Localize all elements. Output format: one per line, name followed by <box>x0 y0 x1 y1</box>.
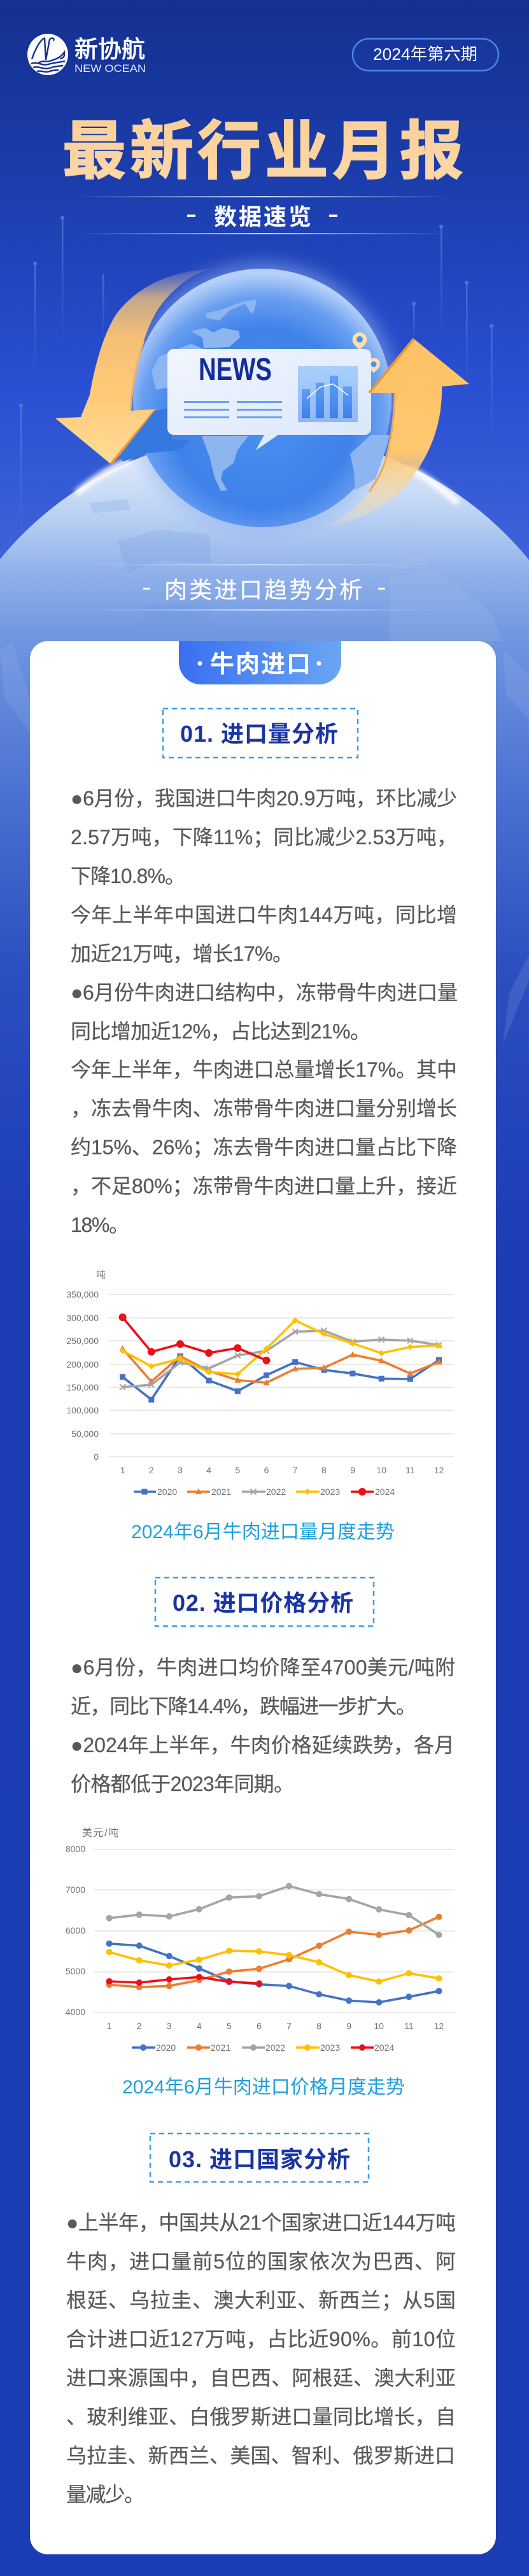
body text: import volume: ●6月份，我国进口牛肉20.9万吨，环比减少 <box>71 787 457 810</box>
y axis labels and grid: 8000 <box>66 1844 85 1854</box>
line chart: monthly import price <box>66 1827 455 2053</box>
chart caption: price: 2024年6月牛肉进口价格月度走势 <box>122 2077 405 2098</box>
x axis labels: 2 <box>149 1465 154 1475</box>
body text: source countries: 合计进口近127万吨，占比近90%。前10位 <box>66 2328 456 2351</box>
body text: source countries <box>66 2211 456 2506</box>
legend: 2023 <box>320 1487 340 1497</box>
heading 03 <box>150 2134 369 2182</box>
y axis labels and grid: 0 <box>94 1452 99 1462</box>
arrow shadow band <box>119 407 193 462</box>
heading 01 <box>163 709 358 758</box>
y axis labels and grid: 350,000 <box>66 1289 99 1299</box>
legend: 2024 <box>375 1487 395 1497</box>
legend: 2021 <box>211 1487 231 1497</box>
text lines in bubble <box>184 401 282 418</box>
heading 03: 03. 进口国家分析 <box>169 2146 350 2172</box>
y axis labels and grid: 300,000 <box>66 1313 99 1323</box>
body text: import volume: 18%。 <box>71 1214 129 1236</box>
legend <box>132 2042 394 2053</box>
subtitle: data overview <box>74 196 452 234</box>
right orange arrow <box>330 339 469 525</box>
body text: import volume: 下降10.8%。 <box>71 865 185 888</box>
x axis labels: 6 <box>257 2021 262 2031</box>
x axis labels: 6 <box>264 1465 269 1475</box>
x axis labels: 3 <box>178 1465 183 1475</box>
x axis labels <box>120 1465 444 1475</box>
y axis labels and grid: 250,000 <box>66 1336 99 1346</box>
x axis labels: 4 <box>197 2021 202 2031</box>
body text: source countries: 乌拉圭、新西兰、美国、智利、俄罗斯进口 <box>66 2444 455 2467</box>
y axis labels and grid: 50,000 <box>71 1429 99 1439</box>
series 2021 <box>109 1917 439 1987</box>
body text: source countries: 、玻利维亚、白俄罗斯进口量同比增长，自 <box>66 2405 456 2428</box>
x axis labels: 7 <box>293 1465 298 1475</box>
body text: import price: ●2024年上半年，牛肉价格延续跌势，各月 <box>71 1734 455 1757</box>
x axis labels: 9 <box>350 1465 355 1475</box>
legend: 2022 <box>265 2042 285 2053</box>
legend: 2024 <box>374 2042 394 2053</box>
body text: import volume: 今年上半年中国进口牛肉144万吨，同比增 <box>71 903 457 926</box>
x axis labels: 11 <box>406 1465 415 1475</box>
heading 02 <box>155 1578 374 1626</box>
issue badge <box>353 39 498 71</box>
body text: import volume: 今年上半年，牛肉进口总量增长17%。其中 <box>71 1058 457 1081</box>
body text: source countries: 量减少。 <box>66 2483 145 2506</box>
body text: import price <box>71 1656 455 1795</box>
globe edge glow <box>76 262 458 534</box>
body text: source countries: ●上半年，中国共从21个国家进口近144万吨 <box>66 2211 456 2234</box>
left orange arrow <box>55 269 210 464</box>
y axis labels and grid: 7000 <box>66 1885 85 1895</box>
logo: 新协航 <box>74 36 145 62</box>
body text: import volume: 约15%、26%；冻去骨牛肉进口量占比下降 <box>71 1136 457 1159</box>
news headline: NEWS <box>199 351 272 387</box>
body text: source countries: 进口来源国中，自巴西、阿根廷、澳大利亚 <box>66 2367 456 2389</box>
series 2023 <box>109 1951 439 1981</box>
x axis labels: 12 <box>434 1465 444 1475</box>
map pins <box>353 332 380 373</box>
series 2024 <box>123 1317 266 1361</box>
continents on globe <box>152 299 390 491</box>
body text: import volume: 2.57万吨，下降11%；同比减少2.53万吨， <box>71 826 457 849</box>
x axis labels: 12 <box>434 2021 444 2031</box>
legend: 2021 <box>211 2042 230 2053</box>
body text: import volume <box>71 787 458 1236</box>
logo: NEW OCEAN <box>74 62 146 74</box>
mini bar chart <box>298 366 358 422</box>
x axis labels: 8 <box>321 1465 327 1475</box>
series 2023 <box>123 1320 439 1374</box>
x axis labels: 8 <box>316 2021 321 2031</box>
legend: 2022 <box>266 1487 286 1497</box>
body text: source countries: 根廷、乌拉圭、澳大利亚、新西兰；从5国 <box>66 2289 456 2312</box>
issue badge: 2024年第六期 <box>373 45 477 64</box>
series 2024 <box>109 1977 259 1983</box>
news speech bubble <box>167 349 371 450</box>
legend: 2020 <box>156 2042 176 2053</box>
y axis labels and grid <box>66 1844 455 2017</box>
tab: beef imports <box>179 641 341 684</box>
x axis labels: 1 <box>107 2021 112 2031</box>
legend <box>134 1487 395 1497</box>
series 2022 <box>109 1886 439 1935</box>
series 2020 <box>109 1944 439 2002</box>
section banner: meat import trends <box>73 564 449 611</box>
body text: import volume: ●6月份牛肉进口结构中，冻带骨牛肉进口量 <box>71 981 458 1004</box>
x axis labels: 5 <box>227 2021 232 2031</box>
central earth globe <box>133 269 391 527</box>
series 2021 <box>123 1348 439 1383</box>
title: 最新行业月报 <box>62 116 467 187</box>
x axis labels: 2 <box>137 2021 142 2031</box>
x axis labels: 7 <box>286 2021 292 2031</box>
legend: 2020 <box>157 1487 177 1497</box>
x axis labels: 11 <box>404 2021 414 2031</box>
x axis labels: 10 <box>374 2021 384 2031</box>
large background globe <box>0 434 529 1118</box>
decorative vertical lines <box>19 216 493 532</box>
tab: beef imports: 牛肉进口 <box>210 651 311 678</box>
body text: import volume: 同比增加近12%，占比达到21%。 <box>71 1020 370 1043</box>
heading 02: 02. 进口价格分析 <box>173 1590 353 1616</box>
body text: import price: 价格都低于2023年同期。 <box>71 1773 294 1795</box>
x axis labels: 10 <box>376 1465 386 1475</box>
subtitle: data overview: 数据速览 <box>214 204 313 230</box>
x axis labels: 9 <box>346 2021 351 2031</box>
y axis labels and grid: 6000 <box>66 1925 85 1936</box>
series 2022 <box>123 1331 439 1387</box>
x axis labels: 4 <box>206 1465 211 1475</box>
white content panel <box>30 641 496 2554</box>
y axis unit: 美元/吨 <box>82 1827 118 1839</box>
body text: import price: 近，同比下降14.4%，跌幅进一步扩大。 <box>71 1695 416 1718</box>
body text: source countries: 牛肉，进口量前5位的国家依次为巴西、阿 <box>66 2250 456 2273</box>
logo <box>27 34 146 75</box>
y axis labels and grid: 4000 <box>66 2007 85 2017</box>
x axis labels: 3 <box>167 2021 172 2031</box>
series 2020 <box>123 1356 439 1399</box>
chart caption: volume: 2024年6月牛肉进口量月度走势 <box>131 1522 395 1543</box>
body text: import price: ●6月份，牛肉进口均价降至4700美元/吨附 <box>71 1656 455 1679</box>
line chart: monthly import volume <box>66 1270 454 1497</box>
y axis labels and grid: 100,000 <box>66 1405 99 1415</box>
y axis labels and grid <box>66 1289 454 1462</box>
body text: import volume: ，不足80%；冻带骨牛肉进口量上升，接近 <box>71 1175 457 1198</box>
x axis labels <box>107 2021 444 2031</box>
body text: import volume: 加近21万吨，增长17%。 <box>71 942 293 965</box>
y axis labels and grid: 200,000 <box>66 1359 99 1369</box>
y axis labels and grid: 150,000 <box>66 1382 99 1392</box>
body text: import volume: ，冻去骨牛肉、冻带骨牛肉进口量分别增长 <box>71 1097 457 1120</box>
legend: 2023 <box>320 2042 340 2053</box>
heading 01: 01. 进口量分析 <box>180 721 338 747</box>
section banner: meat import trends: 肉类进口趋势分析 <box>164 577 364 603</box>
x axis labels: 1 <box>120 1465 125 1475</box>
x axis labels: 5 <box>235 1465 240 1475</box>
y axis unit: 吨 <box>96 1270 106 1280</box>
y axis labels and grid: 5000 <box>66 1966 85 1976</box>
